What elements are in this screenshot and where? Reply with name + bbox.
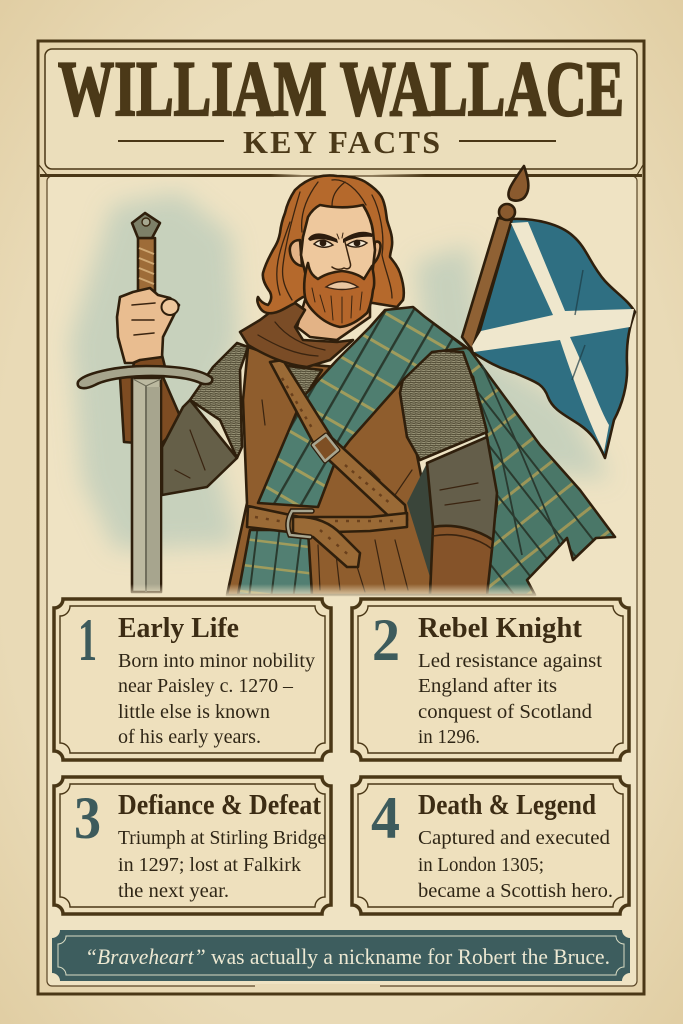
hair back <box>257 175 404 313</box>
card 3: Defiance & Defeat: Triumph at Stirling Bridge <box>118 827 326 849</box>
card 2: Rebel Knight <box>352 599 629 760</box>
header divider <box>40 174 642 177</box>
sword hand bracer <box>120 377 183 445</box>
mouth <box>326 282 358 290</box>
card 2: Rebel Knight: in 1296. <box>418 726 480 748</box>
card 2: Rebel Knight: conquest of Scotland <box>418 701 592 723</box>
chest mail <box>287 366 322 398</box>
cape <box>425 317 615 595</box>
card 3: Defiance & Defeat: Defiance & Defeat <box>118 789 321 821</box>
sword <box>78 213 212 592</box>
subtitle: KEY FACTS <box>243 124 440 160</box>
ears <box>290 240 380 266</box>
hair strands <box>277 180 392 300</box>
tunic <box>227 347 433 595</box>
card 1: Early Life: of his early years. <box>118 726 261 748</box>
header panel <box>45 45 637 169</box>
illustration: William Wallace <box>49 166 635 598</box>
callout banner <box>52 930 630 981</box>
illustration bottom fade <box>49 584 635 598</box>
card 2: Rebel Knight: 2 <box>372 607 400 673</box>
card 4: Death & Legend: Captured and executed <box>418 827 610 849</box>
card 2: Rebel Knight: Led resistance against <box>418 650 602 672</box>
card 4: Death & Legend: 4 <box>371 785 400 851</box>
card 3: Defiance & Defeat <box>54 777 331 914</box>
shadow under arm <box>407 463 433 577</box>
plaid sash <box>258 307 466 507</box>
strap buckle <box>313 435 338 461</box>
card 3: Defiance & Defeat: the next year. <box>118 880 229 902</box>
callout banner: “Braveheart” was actually a nickname for Robert the Bruce. <box>85 944 610 969</box>
card 1: Early Life: Early Life <box>118 612 239 644</box>
face <box>301 205 375 300</box>
card 4: Death & Legend: Death & Legend <box>418 789 596 821</box>
hood <box>240 303 353 367</box>
card 3: Defiance & Defeat: in 1297; lost at Falkirk <box>118 854 302 876</box>
eyes and brows <box>308 232 373 269</box>
card 1: Early Life: little else is known <box>118 701 270 723</box>
card 2: Rebel Knight: Rebel Knight <box>418 612 582 644</box>
left arm <box>162 343 248 495</box>
shoulder strap <box>270 360 407 522</box>
plaid skirt <box>238 530 312 595</box>
neck <box>297 295 370 340</box>
card 4: Death & Legend: in London 1305; <box>418 854 544 876</box>
card 1: Early Life: 1 <box>78 607 97 673</box>
card 3: Defiance & Defeat: 3 <box>74 785 101 851</box>
watercolor background <box>70 192 610 550</box>
card 1: Early Life: near Paisley c. 1270 – <box>118 675 294 697</box>
belt <box>247 506 407 567</box>
flag <box>462 166 635 458</box>
card 2: Rebel Knight: England after its <box>418 675 557 697</box>
card 4: Death & Legend: became a Scottish hero. <box>418 880 613 902</box>
fist <box>117 288 179 363</box>
card 4: Death & Legend <box>352 777 629 914</box>
beard <box>304 263 374 327</box>
card 1: Early Life: Born into minor nobility <box>118 650 316 672</box>
card 1: Early Life <box>54 599 331 760</box>
right arm <box>400 350 497 595</box>
